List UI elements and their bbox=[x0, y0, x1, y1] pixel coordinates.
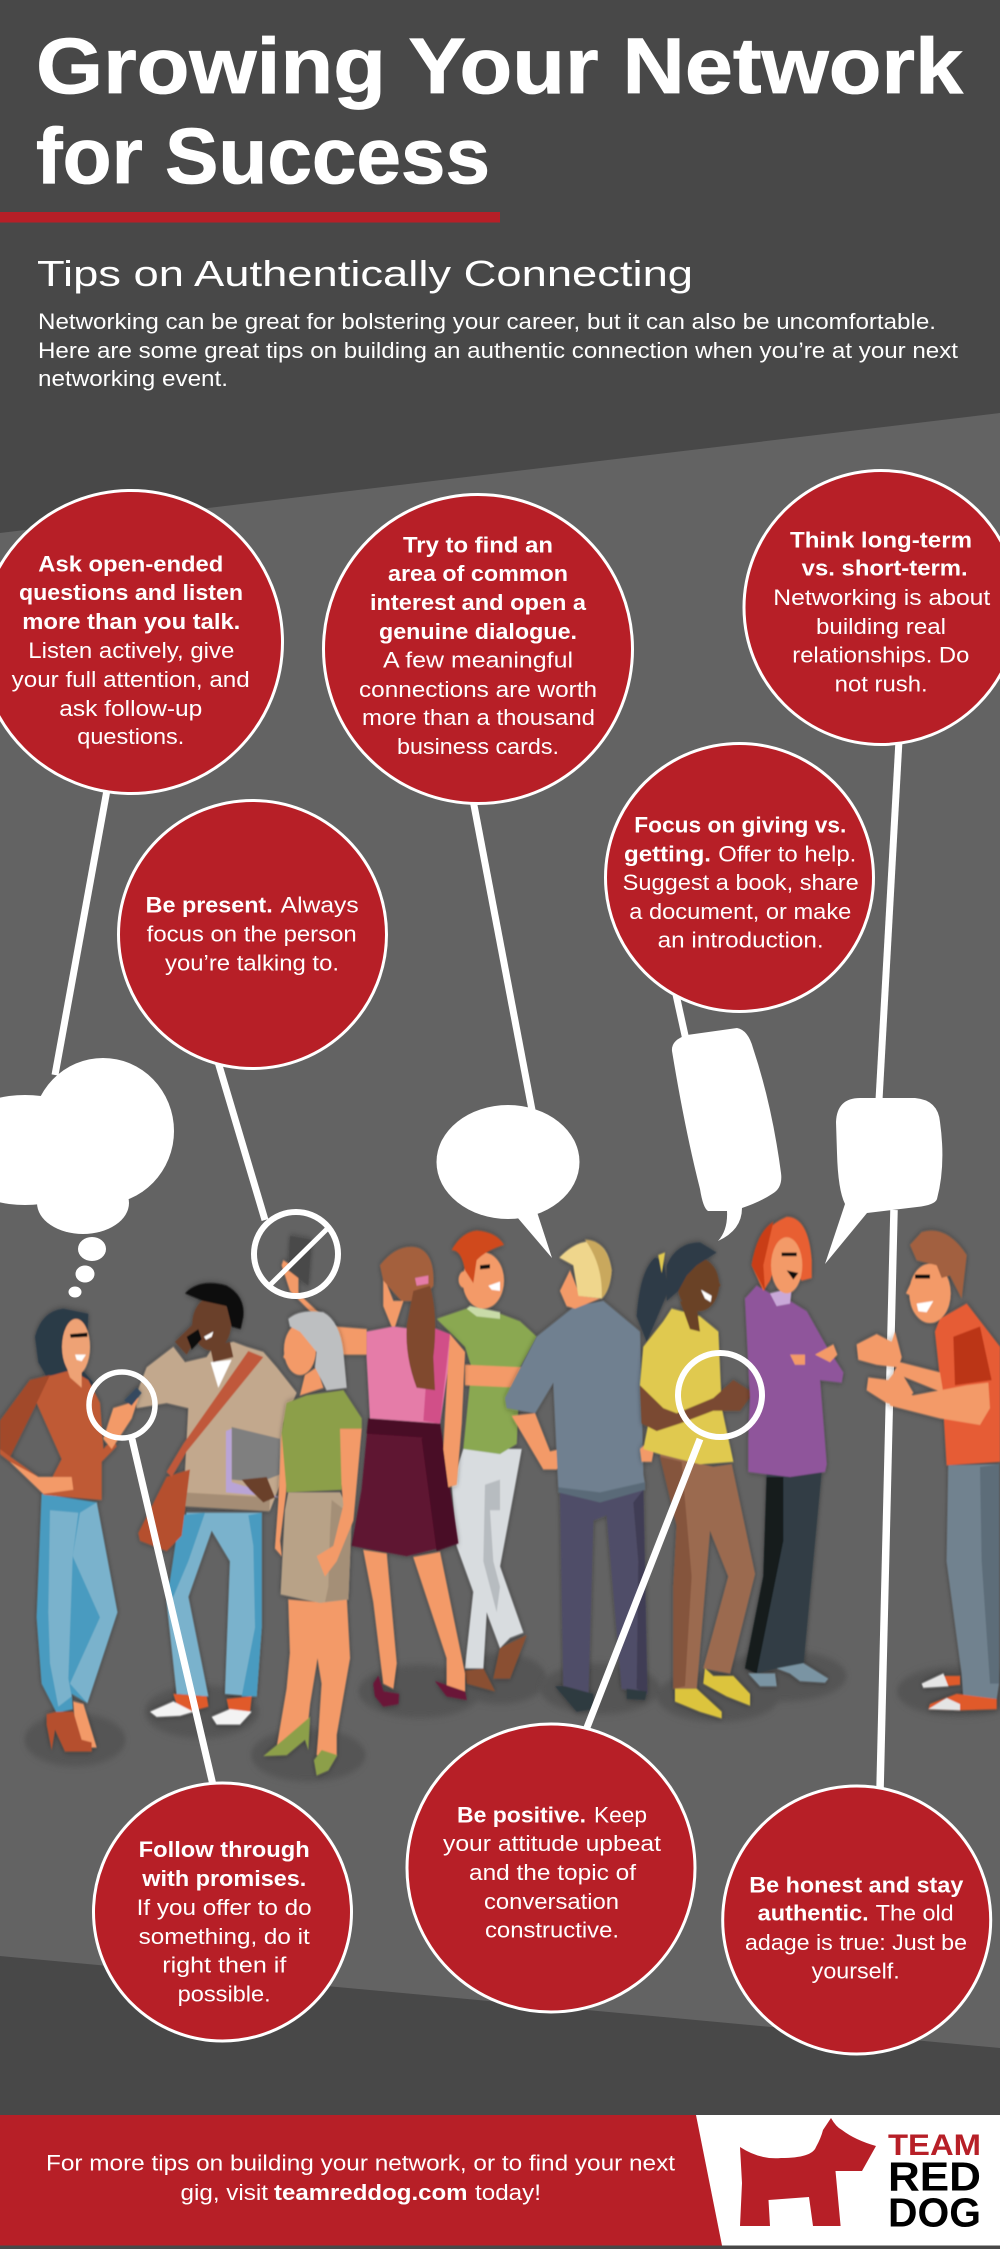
crowd: right group bbox=[505, 1217, 1000, 1722]
crowd: left group bbox=[0, 1231, 547, 1782]
tip circle: open-ended questions: your full attention, and bbox=[12, 667, 250, 692]
tip circle: long-term: relationships. Do bbox=[792, 643, 969, 668]
tip circle: giving vs getting: an introduction. bbox=[658, 928, 824, 953]
footer text: today! bbox=[475, 2180, 541, 2205]
tip circle: follow through: If you offer to do bbox=[137, 1895, 312, 1920]
person: man with satchel bbox=[135, 1283, 297, 1724]
ground shadows left bbox=[24, 1653, 547, 1782]
title underline bbox=[0, 212, 500, 222]
tip circle: long-term: Think long-term bbox=[790, 528, 972, 553]
tip circle: honest and authentic: adage is true: Just be bbox=[745, 1930, 967, 1955]
tip circle: be positive: your attitude upbeat bbox=[443, 1831, 661, 1856]
intro text: Here are some great tips on building an authentic connection when you’re at your next bbox=[38, 338, 958, 363]
intro text: Networking can be great for bolstering your career, but it can also be uncomfortable. bbox=[38, 309, 936, 334]
tip circle: open-ended questions: questions. bbox=[77, 724, 184, 749]
tip circle: honest and authentic bbox=[723, 1786, 991, 2054]
highlight ring: no phone sign bbox=[254, 1212, 338, 1296]
person: man gesturing right bbox=[857, 1231, 1000, 1710]
tip circle: be present: you’re talking to. bbox=[165, 951, 339, 976]
person: woman with grey hair bbox=[263, 1311, 362, 1776]
footer text: teamreddog.com bbox=[274, 2180, 468, 2205]
title bbox=[36, 21, 964, 200]
tip circle: giving vs getting: Focus on giving vs. bbox=[634, 813, 846, 838]
person: woman in pink top bbox=[282, 1236, 467, 1707]
tip circle: giving vs getting: a document, or make bbox=[629, 899, 851, 924]
speech bubble: oval bbox=[436, 1105, 580, 1258]
tip circle: be positive: Keep bbox=[594, 1803, 647, 1828]
highlight ring: phone in hand bbox=[89, 1372, 155, 1438]
connector lines behind the crowd bbox=[55, 740, 899, 1790]
logo text bbox=[888, 2129, 981, 2236]
tip circle: long-term: building real bbox=[816, 614, 946, 639]
subtitle: Tips on Authentically Connecting bbox=[37, 253, 693, 294]
tip circle: long-term: not rush. bbox=[835, 672, 928, 697]
tip circle: be positive bbox=[407, 1724, 695, 2012]
tip circle: honest and authentic: authentic. bbox=[758, 1901, 869, 1926]
tip circle: giving vs getting: getting. bbox=[624, 842, 711, 867]
title: for Success bbox=[36, 111, 490, 200]
ground shadows right bbox=[540, 1651, 1000, 1722]
person: woman with phone bbox=[0, 1309, 142, 1752]
connector line: follow through bbox=[132, 1439, 213, 1785]
tip circle: common interest: genuine dialogue. bbox=[379, 619, 577, 644]
tip circle: open-ended questions: ask follow-up bbox=[59, 696, 202, 721]
tip circle: follow through: Follow through bbox=[139, 1837, 310, 1862]
tip circle: be present bbox=[118, 800, 386, 1068]
intro text: networking event. bbox=[38, 366, 228, 391]
tip circle: open-ended questions bbox=[0, 490, 282, 794]
speech bubble: square right bbox=[825, 1098, 942, 1264]
speech bubble: tall tilted bbox=[672, 1028, 781, 1241]
footer band bbox=[0, 2115, 1000, 2246]
tip circle: honest and authentic: The old bbox=[876, 1901, 954, 1926]
tip circle: be present: focus on the person bbox=[147, 922, 357, 947]
title: Growing Your Network bbox=[36, 21, 964, 110]
tip circle: honest and authentic: yourself. bbox=[812, 1959, 900, 1984]
tip circle: be positive: constructive. bbox=[485, 1918, 619, 1943]
highlight ring: gesture bbox=[678, 1353, 762, 1437]
tip circle: common interest: connections are worth bbox=[359, 677, 597, 702]
tip circle: be positive: conversation bbox=[484, 1889, 619, 1914]
tip circle: open-ended questions: more than you talk. bbox=[22, 609, 240, 634]
footer text bbox=[46, 2151, 675, 2205]
tip circle: long-term bbox=[744, 470, 1000, 744]
tip circle: common interest: area of common bbox=[388, 561, 568, 586]
tip circle: be present: Be present. bbox=[146, 893, 273, 918]
tip circle: long-term: Networking is about bbox=[773, 585, 990, 610]
tip circle: be positive: and the topic of bbox=[469, 1860, 637, 1885]
tip circle: common interest bbox=[324, 494, 632, 804]
tip circle: common interest: business cards. bbox=[397, 734, 559, 759]
footer text: gig, visit bbox=[180, 2180, 268, 2205]
logo text: DOG bbox=[888, 2190, 981, 2236]
tip circle: common interest: A few meaningful bbox=[383, 648, 573, 673]
tip circle: long-term: vs. short-term. bbox=[802, 556, 968, 581]
tip circle: common interest: interest and open a bbox=[370, 590, 587, 615]
logo text: RED bbox=[888, 2154, 981, 2200]
tip circle: follow through: something, do it bbox=[139, 1924, 310, 1949]
tip circle: follow through bbox=[94, 1783, 352, 2041]
person: woman in yellow top bbox=[637, 1242, 755, 1718]
tip circle: open-ended questions: Ask open-ended bbox=[38, 552, 223, 577]
tip circle: honest and authentic: Be honest and stay bbox=[749, 1873, 964, 1898]
tip circle: giving vs getting: Suggest a book, share bbox=[623, 870, 859, 895]
tip circle: common interest: more than a thousand bbox=[362, 705, 595, 730]
connector line: be positive bbox=[586, 1439, 700, 1730]
tip circle: be positive: Be positive. bbox=[457, 1803, 586, 1828]
person: woman in purple sweater bbox=[745, 1217, 843, 1686]
logo text: TEAM bbox=[888, 2129, 981, 2162]
intro text bbox=[38, 309, 958, 391]
tip circle: open-ended questions: questions and listen bbox=[19, 580, 243, 605]
tip circle: follow through: with promises. bbox=[141, 1866, 306, 1891]
person: man in grey shirt bbox=[505, 1240, 647, 1712]
tip circle: follow through: possible. bbox=[178, 1982, 271, 2007]
tip circle: giving vs getting bbox=[606, 744, 874, 1012]
thought bubble bbox=[0, 1058, 174, 1298]
tip circle: follow through: right then if bbox=[162, 1953, 287, 1978]
person: man with red hair bbox=[437, 1231, 537, 1691]
footer text: For more tips on building your network, or to find your next bbox=[46, 2151, 675, 2176]
tip circle: open-ended questions: Listen actively, give bbox=[28, 638, 234, 663]
tip circle: be present: Always bbox=[281, 893, 359, 918]
icon: red dog logo bbox=[740, 2118, 876, 2226]
tip circle: giving vs getting: Offer to help. bbox=[718, 842, 856, 867]
tip circle: common interest: Try to find an bbox=[403, 533, 553, 558]
